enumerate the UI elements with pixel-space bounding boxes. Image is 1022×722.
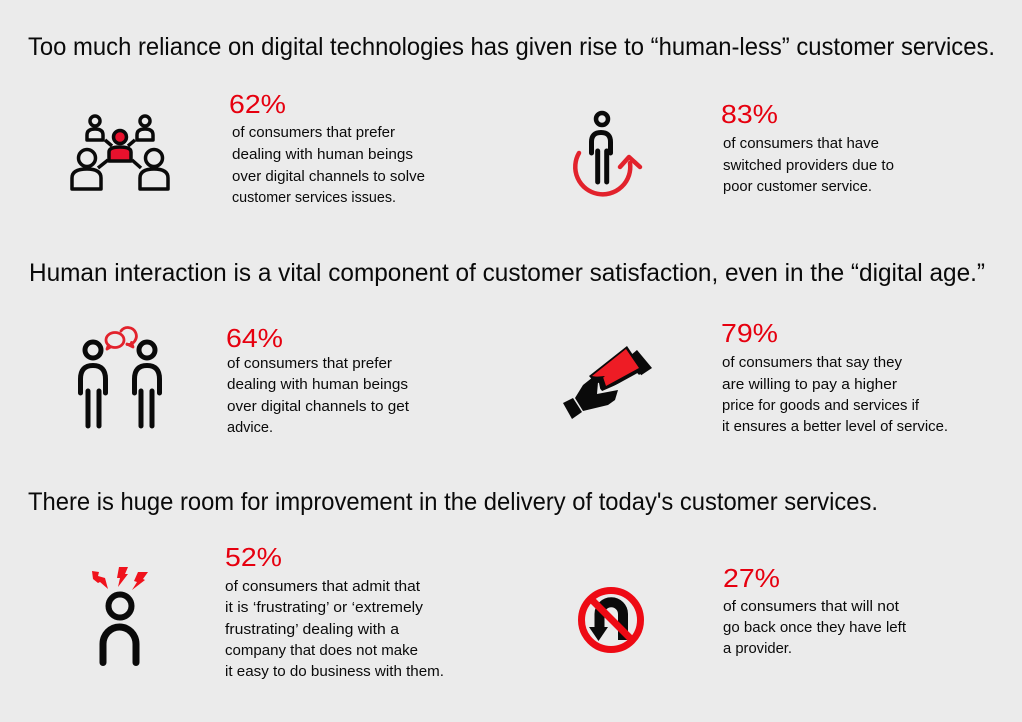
stat: 27%: 27% <box>723 563 780 593</box>
stat: 27%: of consumers that will not <box>723 598 900 615</box>
stat: 79%: price for goods and services if <box>722 397 920 414</box>
heading: human-less customer services: Too much reliance on digital technologies has given rise to “human-less” customer services. <box>28 33 995 61</box>
stat: 64% <box>226 323 410 436</box>
stat: 62%: 62% <box>229 89 286 119</box>
stat: 64%: over digital channels to get <box>227 398 410 415</box>
stat: 83%: 83% <box>721 99 778 129</box>
stat: 64%: of consumers that prefer <box>227 355 392 372</box>
stat: 79%: are willing to pay a higher <box>722 376 897 393</box>
stat: 52%: of consumers that admit that <box>225 578 421 595</box>
stat: 79%: of consumers that say they <box>722 354 902 371</box>
stat: 79%: 79% <box>721 318 778 348</box>
stat: 83%: switched providers due to <box>723 157 894 174</box>
stat: 62%: dealing with human beings <box>232 146 413 163</box>
stat: 83% <box>721 99 894 195</box>
stat: 62%: customer services issues. <box>232 189 396 206</box>
stat: 52%: it easy to do business with them. <box>225 663 444 680</box>
stat: 62%: over digital channels to solve <box>232 168 425 185</box>
icon: frustrated person <box>92 567 148 662</box>
stat: 52% <box>225 542 444 680</box>
stat: 62% <box>229 89 425 206</box>
stat: 52%: frustrating’ dealing with a <box>225 621 400 638</box>
stat: 27% <box>723 563 907 657</box>
stat: 62%: of consumers that prefer <box>232 124 395 141</box>
stat: 52%: company that does not make <box>225 642 418 659</box>
stat: 52%: 52% <box>225 542 282 572</box>
icon: two people talking <box>80 328 160 426</box>
stat: 64%: dealing with human beings <box>227 376 408 393</box>
stat: 52%: it is ‘frustrating’ or ‘extremely <box>225 599 424 616</box>
stat: 83%: poor customer service. <box>723 178 872 195</box>
stat: 64%: 64% <box>226 323 283 353</box>
icon: connected people network <box>72 116 168 189</box>
stat: 27%: go back once they have left <box>723 619 907 636</box>
icon: person with return arrow <box>575 113 640 194</box>
icon: no U-turn sign <box>582 590 640 650</box>
icon: hand holding banknote <box>563 346 652 419</box>
heading: room for improvement: There is huge room for improvement in the delivery of today's customer services. <box>28 488 878 516</box>
stat: 64%: advice. <box>227 419 273 436</box>
stat: 79% <box>721 318 948 435</box>
stat: 27%: a provider. <box>723 640 792 657</box>
stat: 83%: of consumers that have <box>723 135 879 152</box>
stat: 79%: it ensures a better level of service. <box>722 418 948 435</box>
heading: human interaction: Human interaction is a vital component of customer satisfaction, even in the “digital age.” <box>29 259 985 287</box>
